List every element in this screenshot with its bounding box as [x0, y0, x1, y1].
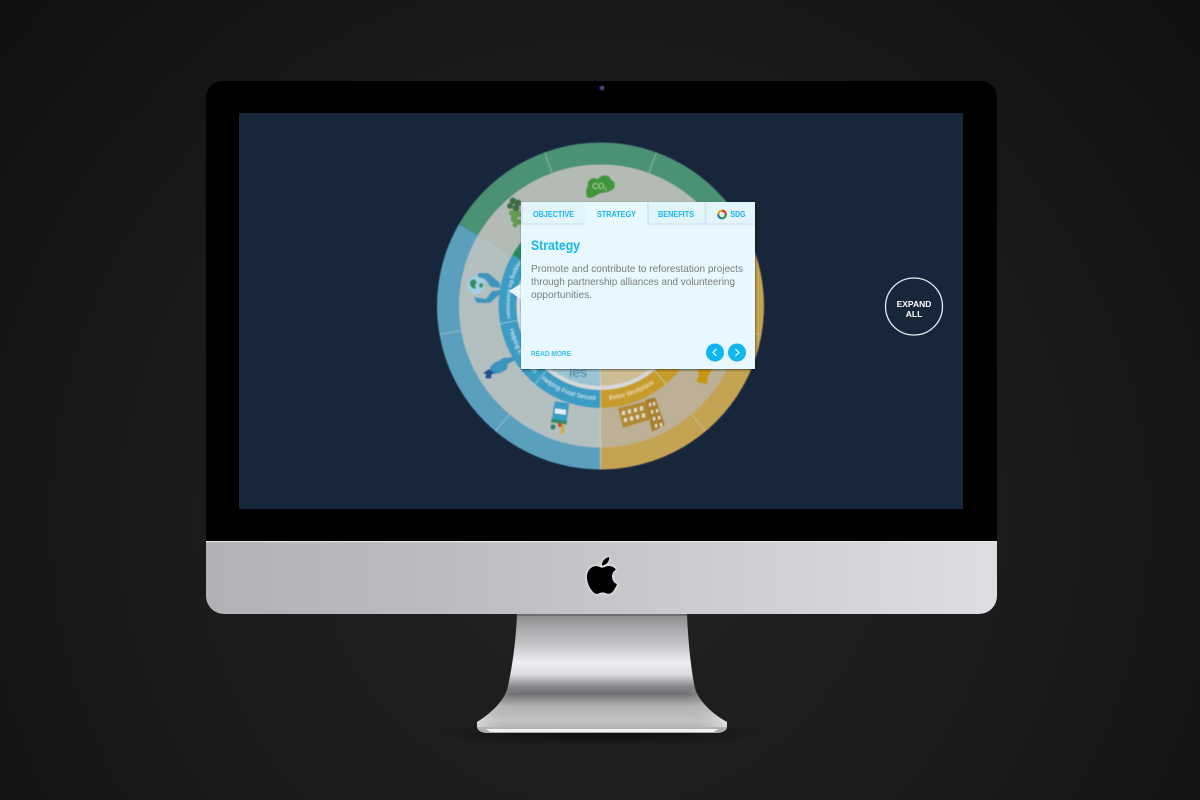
panel body text: Promote and contribute to reforestation projects — [531, 263, 743, 275]
centre: gold quadrant — [600, 266, 681, 386]
tab: objective: OBJECTIVE — [533, 210, 575, 219]
floor shadow under stand — [430, 719, 770, 747]
black bezel — [206, 81, 997, 542]
icon: CO2 cloud: CO — [592, 182, 604, 191]
icon: CO2 cloud: 2 — [604, 186, 607, 192]
icon: apple logo — [587, 557, 617, 594]
icon: graduate — [483, 357, 514, 378]
silver chin — [206, 542, 997, 614]
panel body text — [531, 263, 743, 301]
tab: SDG: SDG — [730, 210, 746, 219]
icon: office building — [618, 397, 665, 432]
icon: gold hand — [696, 369, 713, 384]
band label: food security: Helping Food Security — [541, 376, 596, 401]
expand all button: EXPAND — [897, 299, 931, 309]
icon: hands holding globe — [467, 273, 500, 303]
panel heading: Strategy — [531, 238, 580, 253]
tab bar — [521, 202, 755, 225]
band label: environment: Helping the Environment — [506, 260, 521, 320]
expand all button: ALL — [906, 309, 922, 319]
inner band: green segment — [512, 204, 689, 306]
popup panel — [509, 202, 755, 369]
webcam — [599, 85, 605, 91]
wheel diagram — [436, 142, 765, 470]
icon: food cart — [550, 401, 569, 434]
middle ring: blue segment — [459, 235, 600, 448]
outer ring: gold segment — [600, 224, 764, 470]
middle ring: gold segment — [600, 235, 742, 448]
chin highlight — [206, 541, 997, 542]
icon: SDG ring — [718, 211, 726, 218]
panel body text: through partnership alliances and volunteering — [531, 276, 735, 288]
ring dividers — [440, 152, 762, 431]
monitor stand — [477, 614, 727, 733]
monitor mockup scene — [206, 81, 997, 800]
tab: benefits: BENEFITS — [658, 210, 695, 219]
centre vertical split — [600, 306, 601, 470]
centre ring — [516, 222, 684, 390]
panel body text: opportunities. — [531, 289, 592, 301]
centre: blue quadrant — [520, 266, 600, 386]
screen — [239, 113, 963, 509]
outer ring: green segment — [459, 142, 742, 306]
monitor body — [206, 81, 997, 614]
icon: CO2 cloud — [586, 175, 615, 198]
centre label: Communities — [505, 364, 587, 380]
icon: tree — [507, 198, 522, 228]
next button — [728, 344, 746, 362]
inner band dividers — [500, 321, 666, 384]
outer ring: blue segment — [437, 224, 600, 470]
panel body — [521, 202, 755, 369]
band label: education: Helping Education — [509, 328, 538, 374]
read more link: READ MORE — [531, 351, 571, 358]
inner band: gold segment — [600, 255, 702, 408]
previous button — [706, 344, 724, 362]
inner band: blue segment — [499, 255, 600, 408]
middle ring: green segment — [478, 165, 723, 306]
popup pointer — [509, 283, 522, 300]
band label: better workplace: Better Workplace — [608, 380, 654, 400]
expand all button — [886, 278, 942, 335]
tab: strategy: STRATEGY — [597, 210, 637, 219]
